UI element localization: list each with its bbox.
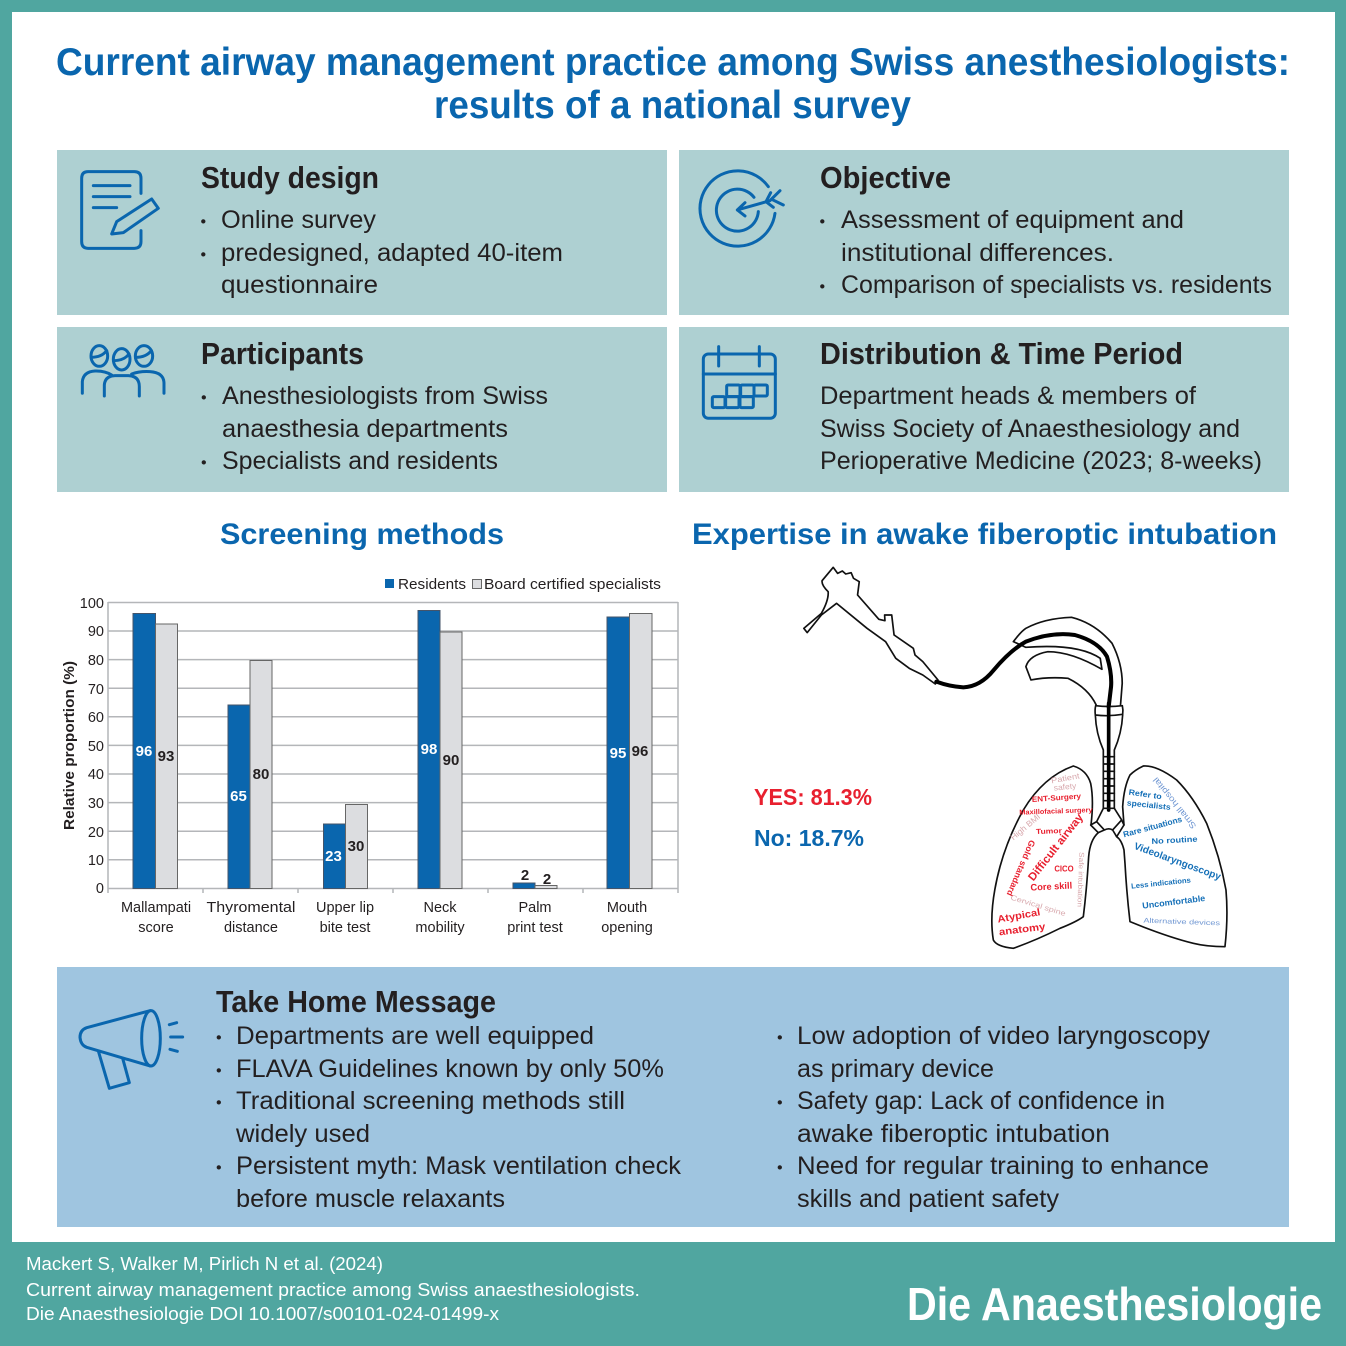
text: right messages: Low adoption of video laryngoscopy xyxy=(797,1022,1211,1050)
value labels: 2 xyxy=(521,867,529,884)
text: study design list: • xyxy=(200,214,206,230)
text: distribution description xyxy=(820,382,1262,475)
text: right messages: Need for regular training to enhance xyxy=(797,1152,1209,1180)
text: right messages: • xyxy=(777,1030,783,1046)
illustration: airway with fiberoptic scope xyxy=(804,567,1122,707)
text: right messages xyxy=(777,1022,1211,1213)
word cloud: left lung: Cervical spine xyxy=(1009,893,1067,918)
text: objective list: Comparison of specialists vs. residents xyxy=(841,271,1272,299)
text: right messages: • xyxy=(777,1160,783,1176)
value labels: 93 xyxy=(158,748,174,765)
text: participants list: • xyxy=(201,454,207,472)
word cloud: left lung: Safe intubation xyxy=(1075,852,1084,907)
value labels: 65 xyxy=(230,788,247,805)
word cloud: left lung: High BMI xyxy=(1008,811,1042,842)
heading: expertise in awake fiberoptic intubation: Expertise in awake fiberoptic intubation xyxy=(692,518,1277,551)
text: participants list: anaesthesia departments xyxy=(222,415,508,443)
word cloud: left lung: anatomy xyxy=(998,922,1047,938)
text: objective list xyxy=(820,206,1272,299)
value labels: 98 xyxy=(421,741,437,758)
footer: citation: Mackert S, Walker M, Pirlich N et al. (2024) xyxy=(26,1254,383,1274)
text: study design list: predesigned, adapted 40-item xyxy=(221,239,563,267)
category labels: Thyromental xyxy=(206,900,296,916)
text: study design list: Online survey xyxy=(221,206,376,234)
word cloud: left lung: Tumor xyxy=(1036,826,1062,836)
text: participants list: • xyxy=(201,390,207,406)
heading: screening methods: Screening methods xyxy=(220,518,504,551)
title: Current airway management practice among Swiss anesthesiologists: xyxy=(56,41,1290,84)
text: left messages: widely used xyxy=(235,1120,370,1148)
specialist bars xyxy=(156,614,652,888)
word cloud: right lung: Uncomfortable xyxy=(1142,893,1206,911)
text: right messages: Safety gap: Lack of confidence in xyxy=(797,1087,1165,1115)
y axis labels: 60 xyxy=(88,710,104,726)
text: objective list: • xyxy=(820,214,825,230)
heading: objective: Objective xyxy=(820,160,951,195)
panel: participants xyxy=(57,327,667,492)
category labels: mobility xyxy=(415,920,465,936)
text: left messages: Persistent myth: Mask ventilation check xyxy=(236,1152,682,1180)
statistic: yes and no answers: YES: 81.3% xyxy=(754,784,872,810)
panel: distribution and time period xyxy=(679,327,1289,492)
text: left messages: FLAVA Guidelines known by only 50% xyxy=(236,1055,664,1083)
statistic: yes and no answers xyxy=(754,784,872,851)
y axis labels: 90 xyxy=(88,624,104,640)
value labels: 90 xyxy=(443,752,459,769)
word cloud: left lung: Core skill xyxy=(1030,880,1072,893)
word cloud: left lung: safety xyxy=(1053,781,1077,793)
heading: study design: Study design xyxy=(201,160,379,195)
word cloud: left lung: CICO xyxy=(1054,864,1074,873)
chart legend: Residents xyxy=(398,577,466,593)
title: results of a national survey xyxy=(434,84,911,127)
y axis labels: 40 xyxy=(88,767,104,783)
text: objective list: Assessment of equipment and xyxy=(841,206,1184,234)
y axis labels: 70 xyxy=(88,682,104,698)
footer: citation: Current airway management practice among Swiss anaesthesiologists. xyxy=(26,1280,640,1300)
text: participants list xyxy=(201,382,548,475)
y axis labels xyxy=(80,596,104,897)
y axis labels: 0 xyxy=(96,881,104,897)
category labels: distance xyxy=(224,920,278,936)
word cloud: left lung xyxy=(997,771,1093,938)
value labels: 96 xyxy=(136,743,152,760)
text: distribution description: Swiss Society of Anaesthesiology and xyxy=(820,415,1240,443)
text: objective list: institutional differences. xyxy=(841,239,1114,267)
y axis title: Relative proportion (%) xyxy=(62,661,78,830)
text: left messages: before muscle relaxants xyxy=(236,1185,505,1213)
value labels: 2 xyxy=(543,871,551,888)
value labels: 30 xyxy=(348,838,364,855)
text: left messages: Departments are well equipped xyxy=(236,1022,594,1050)
statistic: yes and no answers: No: 18.7% xyxy=(754,825,864,851)
text: distribution description: Perioperative Medicine (2023; 8-weeks) xyxy=(820,447,1262,475)
chart legend: Board certified specialists xyxy=(484,577,661,593)
word cloud: right lung xyxy=(1122,775,1223,927)
footer: citation: Die Anaesthesiologie DOI 10.1007/s00101-024-01499-x xyxy=(26,1304,499,1324)
word cloud: right lung: Rare situations xyxy=(1122,814,1183,839)
text: left messages: • xyxy=(216,1030,222,1046)
y axis labels: 80 xyxy=(88,653,104,669)
y axis labels: 100 xyxy=(80,596,104,612)
text: objective list: • xyxy=(820,278,825,296)
text: participants list: Specialists and residents xyxy=(222,447,498,475)
icon: megaphone xyxy=(80,1011,183,1088)
chart legend xyxy=(385,577,661,593)
icon: calendar xyxy=(703,347,775,418)
word cloud: right lung: No routine xyxy=(1151,835,1198,846)
icon: target and arrow xyxy=(700,171,783,246)
value labels xyxy=(136,741,648,888)
word cloud: left lung: Maxillofacial surgery xyxy=(1019,807,1093,817)
bar chart: screening methods xyxy=(62,577,678,936)
word cloud: left lung: Patient xyxy=(1050,771,1081,785)
text: left messages: • xyxy=(216,1062,222,1080)
text: right messages: as primary device xyxy=(797,1055,994,1083)
value labels: 23 xyxy=(325,848,342,865)
heading: participants: Participants xyxy=(201,336,364,371)
text: study design list: questionnaire xyxy=(221,271,378,299)
category labels: Upper lip xyxy=(316,900,374,916)
word cloud: right lung: Less indications xyxy=(1131,875,1191,891)
word cloud: left lung: Gold standard xyxy=(1005,839,1037,898)
bronchi xyxy=(1091,808,1124,837)
word cloud: right lung: specialists xyxy=(1126,798,1172,812)
panel: objective xyxy=(679,150,1289,315)
category labels: Mouth xyxy=(607,900,647,916)
text: right messages: skills and patient safety xyxy=(797,1185,1059,1213)
word cloud: left lung: Difficult airway xyxy=(1026,811,1086,884)
text: left messages: Traditional screening methods still xyxy=(236,1087,625,1115)
panel: study design xyxy=(57,150,667,315)
text: distribution description: Department heads & members of xyxy=(820,382,1196,410)
word cloud: right lung: Alternative devices xyxy=(1143,918,1221,927)
illustration: trachea and larynx xyxy=(1095,703,1123,810)
y axis labels: 30 xyxy=(88,796,104,812)
word cloud: right lung: Refer to xyxy=(1128,788,1162,801)
text: study design list xyxy=(200,206,563,299)
resident bars xyxy=(133,610,630,888)
word cloud: right lung: Videolaryngoscopy xyxy=(1132,841,1223,883)
word cloud: left lung: ENT-Surgery xyxy=(1032,792,1082,804)
text: study design list: • xyxy=(200,246,206,264)
category labels: Mallampati xyxy=(121,900,191,916)
heading: distribution and time period: Distribution & Time Period xyxy=(820,336,1183,371)
icon: document and pencil xyxy=(82,172,158,248)
y axis labels: 10 xyxy=(88,853,104,869)
text: participants list: Anesthesiologists from Swiss xyxy=(222,382,548,410)
text: right messages: awake fiberoptic intubation xyxy=(797,1120,1110,1148)
word cloud: left lung: Atypical xyxy=(997,907,1041,926)
illustration: lungs with word clouds xyxy=(992,766,1227,948)
y axis labels: 20 xyxy=(88,825,104,841)
value labels: 96 xyxy=(632,743,648,760)
category labels xyxy=(121,900,653,936)
y axis labels: 50 xyxy=(88,739,104,755)
title xyxy=(56,41,1290,127)
category labels: Palm xyxy=(518,900,552,916)
panel: take home message xyxy=(57,967,1289,1227)
text: left messages: • xyxy=(216,1094,222,1112)
text: left messages: • xyxy=(216,1160,222,1176)
left lung outline xyxy=(992,766,1098,948)
word cloud: right lung: Small hospital xyxy=(1150,775,1198,831)
value labels: 95 xyxy=(610,745,626,762)
text: right messages: • xyxy=(777,1094,783,1112)
category labels: Neck xyxy=(423,900,457,916)
value labels: 80 xyxy=(253,766,269,783)
category labels: opening xyxy=(601,920,653,936)
category labels: print test xyxy=(507,920,563,936)
footer: citation xyxy=(26,1254,640,1324)
icon: three people xyxy=(82,346,164,396)
text: left messages xyxy=(216,1022,682,1213)
right lung outline xyxy=(1117,766,1227,947)
category labels: score xyxy=(138,920,174,936)
category labels: bite test xyxy=(320,920,370,936)
heading: take home message: Take Home Message xyxy=(216,984,496,1019)
